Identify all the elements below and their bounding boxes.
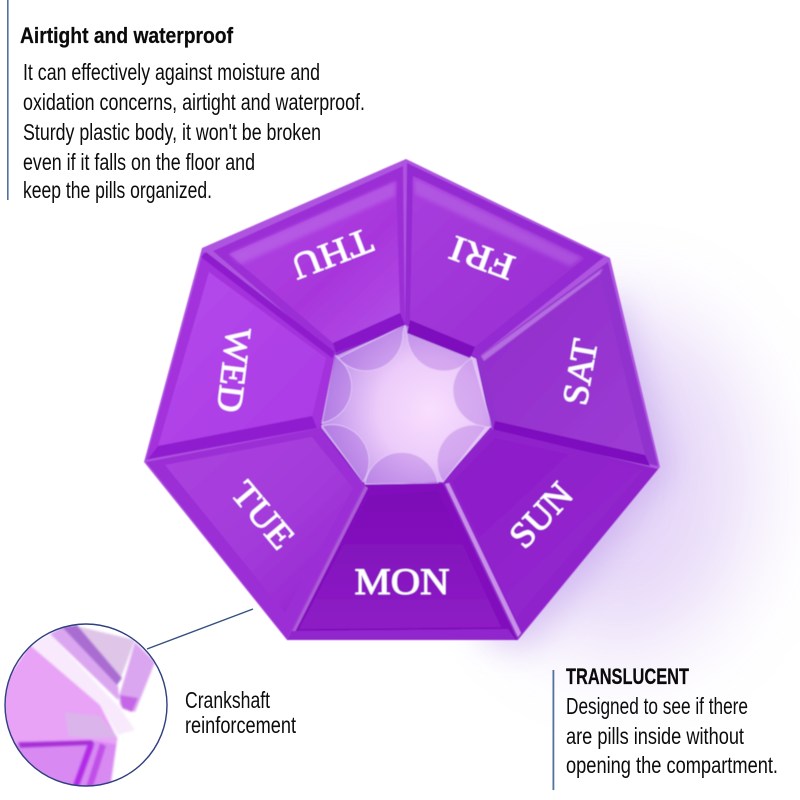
- outer rim: [144, 159, 660, 640]
- divider: bottom right: [552, 670, 554, 790]
- heading: translucent: TRANSLUCENT: [566, 664, 689, 689]
- hub scallops: [322, 325, 492, 484]
- text block: translucent description: are pills inside without: [566, 723, 744, 749]
- heading: airtight and waterproof: Airtight and waterproof: [20, 23, 233, 48]
- text block: airtight description: It can effectively against moisture and: [23, 59, 320, 85]
- label: MON: MON: [354, 562, 450, 603]
- compartment: SAT: [477, 262, 658, 466]
- hub opening: [320, 325, 492, 485]
- divider: top left: [7, 0, 9, 200]
- text block: airtight description: Sturdy plastic body, it won't be broken: [23, 119, 321, 145]
- text: crankshaft reinforcement: Crankshaft: [185, 687, 270, 713]
- text block: airtight description: [23, 59, 365, 203]
- text block: airtight description: even if it falls on the floor and: [23, 149, 255, 175]
- label: TUE: TUE: [223, 473, 303, 557]
- compartment: THU: [213, 166, 405, 354]
- text: crankshaft reinforcement: reinforcement: [185, 712, 296, 738]
- compartment: FRI: [405, 163, 604, 358]
- text block: translucent description: [566, 693, 778, 778]
- label: FRI: FRI: [444, 228, 520, 288]
- label: THU: THU: [286, 220, 378, 288]
- compartment: WED: [146, 252, 335, 460]
- label: SAT: SAT: [555, 336, 605, 408]
- text block: airtight description: keep the pills organized.: [23, 177, 212, 203]
- compartment: MON: [287, 484, 518, 640]
- callout connector line: [147, 609, 253, 649]
- text: crankshaft reinforcement: [185, 687, 296, 738]
- compartment: SUN: [443, 429, 658, 639]
- label: SUN: SUN: [501, 474, 581, 556]
- background shadow glow: [480, 290, 750, 650]
- pill box: [144, 159, 660, 640]
- callout: magnified detail circle: [0, 620, 175, 790]
- compartment: TUE: [146, 428, 364, 639]
- text block: airtight description: oxidation concerns, airtight and waterproof.: [23, 89, 365, 115]
- label: WED: WED: [209, 325, 259, 415]
